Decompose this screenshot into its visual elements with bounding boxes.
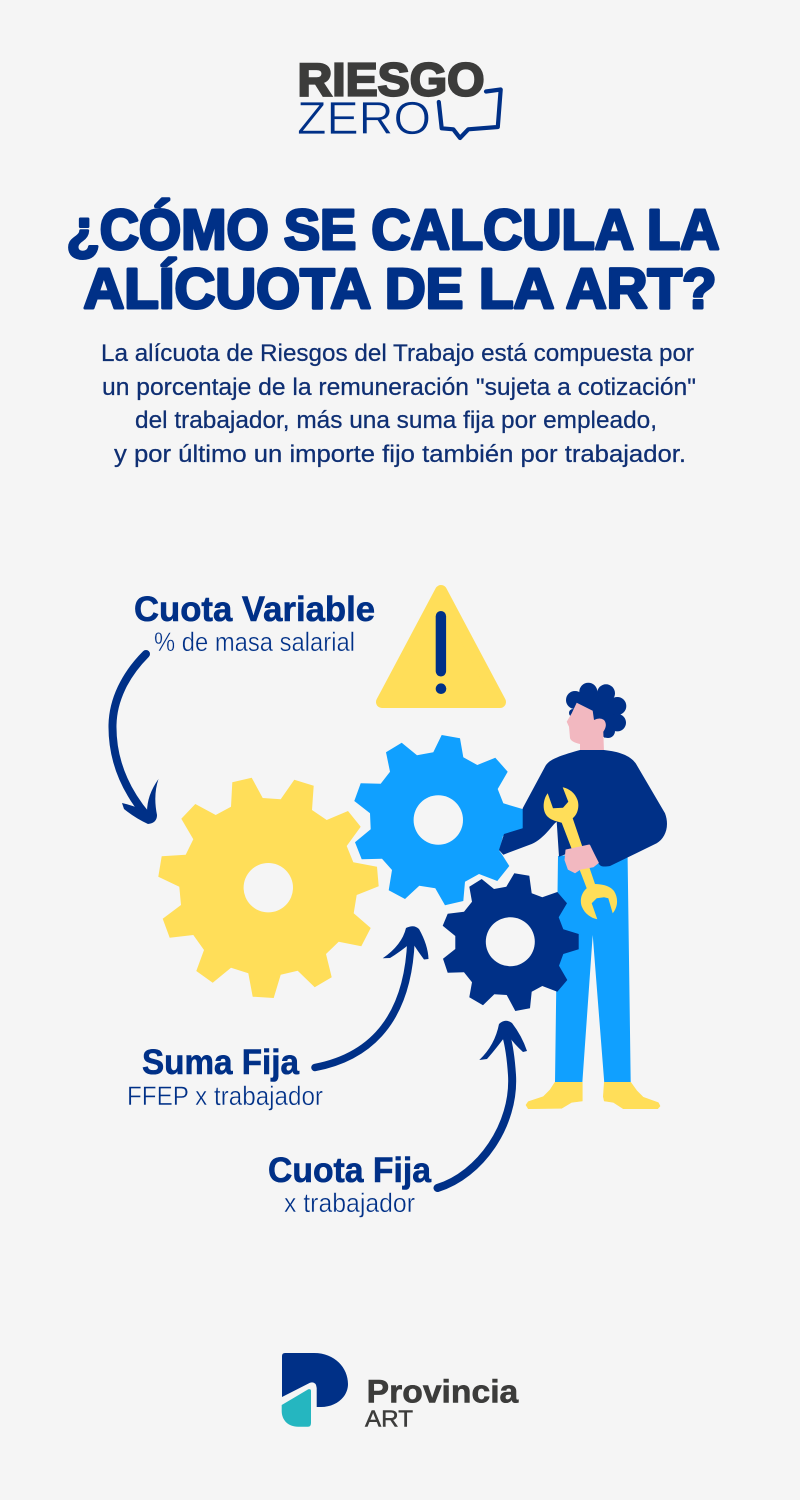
hand — [565, 845, 598, 873]
intro text block: un porcentaje de la remuneración "sujeta a cotización" — [102, 374, 696, 401]
yellow gear — [158, 778, 379, 998]
label: Cuota Variable: % de masa salarial — [154, 627, 355, 657]
label: Cuota Variable — [134, 590, 375, 657]
trousers — [555, 850, 631, 1083]
arrow: Cuota Fija to navy gear — [438, 1021, 527, 1188]
title: ¿CÓMO SE CALCULA LA — [66, 198, 720, 262]
intro text block — [101, 340, 696, 468]
logo: Provincia ART — [282, 1353, 519, 1432]
label: Cuota Fija: x trabajador — [284, 1188, 415, 1218]
label: Cuota Fija — [268, 1151, 432, 1218]
label: Cuota Variable: Cuota Variable — [134, 590, 375, 629]
intro text block: del trabajador, más una suma fija por empleado, — [135, 407, 657, 434]
right shoe — [603, 1082, 660, 1109]
shirt — [499, 750, 667, 866]
logo: Provincia ART: Provincia — [367, 1374, 519, 1410]
intro text block: y por último un importe fijo también por trabajador. — [114, 441, 686, 468]
wrench — [544, 787, 617, 919]
title — [66, 198, 720, 321]
label: Suma Fija: Suma Fija — [142, 1043, 300, 1082]
arrow: Cuota Variable to yellow gear — [112, 654, 158, 824]
label: Suma Fija — [127, 1043, 323, 1111]
hair — [566, 683, 626, 738]
face and neck — [567, 703, 606, 752]
logo: Riesgo Zero — [297, 54, 501, 144]
logo mark navy — [282, 1353, 348, 1407]
arrow: Suma Fija to blue gear — [315, 926, 428, 1068]
left shoe — [526, 1082, 582, 1109]
label: Cuota Fija: Cuota Fija — [268, 1151, 432, 1190]
navy gear — [443, 873, 579, 1011]
intro text block: La alícuota de Riesgos del Trabajo está compuesta por — [101, 340, 694, 367]
label: Suma Fija: FFEP x trabajador — [127, 1081, 323, 1111]
person with wrench — [499, 683, 667, 1109]
logo: Riesgo Zero: ZERO — [297, 92, 431, 144]
title: ALÍCUOTA DE LA ART? — [84, 257, 716, 321]
icon: warning triangle — [382, 591, 500, 702]
logo: Provincia ART: ART — [365, 1406, 413, 1432]
logo mark teal — [282, 1389, 311, 1427]
logo: Riesgo Zero: RIESGO — [298, 54, 484, 106]
blue gear — [354, 735, 523, 905]
